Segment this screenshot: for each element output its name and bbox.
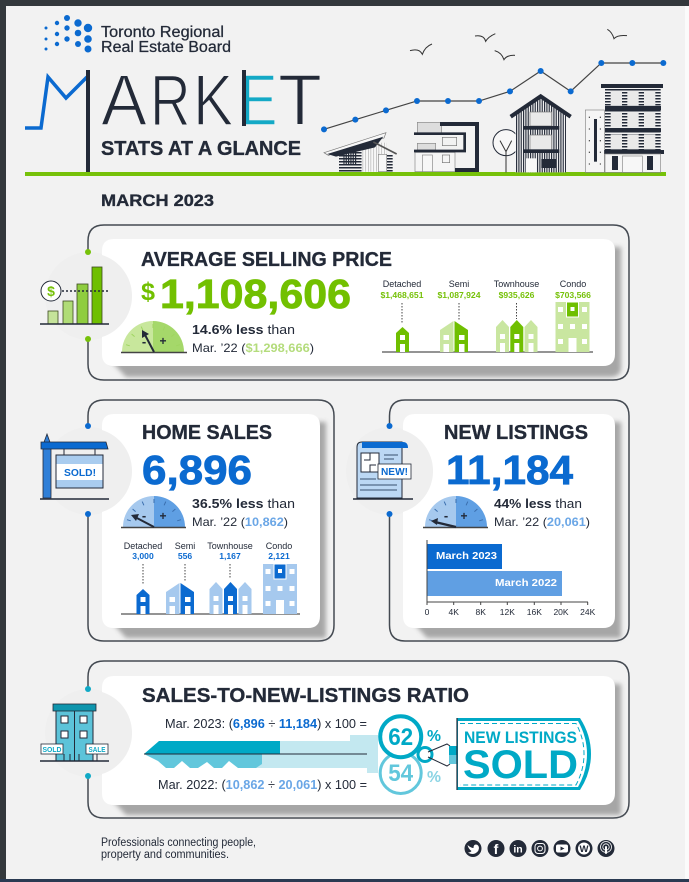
gauge: listings change: + bbox=[460, 509, 468, 523]
breakdown by home type: 3,000 bbox=[132, 551, 154, 561]
tag: new listings sold: SOLD bbox=[463, 743, 578, 787]
tag: new listings sold bbox=[428, 718, 591, 790]
title: MARKET: E bbox=[240, 60, 277, 141]
gauge: sales change bbox=[121, 496, 186, 528]
bar chart: listings March 2023 vs March 2022: 16K bbox=[527, 607, 542, 617]
breakdown by home type: Townhouse bbox=[207, 541, 253, 551]
title: MARKET: A bbox=[101, 61, 147, 141]
gauge: listings change: - bbox=[444, 508, 448, 523]
gauge: listings change bbox=[423, 496, 488, 528]
gauge: sales change: + bbox=[159, 509, 167, 523]
title: MARKET: R bbox=[150, 60, 191, 141]
footer tagline: property and communities. bbox=[101, 849, 229, 861]
title: MARKET bbox=[25, 60, 322, 176]
gauge: price change: + bbox=[159, 334, 167, 348]
bar chart: listings March 2023 vs March 2022: 24K bbox=[580, 607, 596, 617]
icon: bar chart with dollar bbox=[40, 267, 109, 324]
heading: NEW LISTINGS bbox=[444, 421, 588, 444]
icon: linkedin: in bbox=[513, 844, 523, 856]
breakdown by home type: Townhouse bbox=[494, 279, 539, 289]
icon: facebook bbox=[488, 840, 504, 857]
breakdown by home type: Condo bbox=[560, 279, 586, 289]
date heading: MARCH 2023 bbox=[101, 191, 214, 210]
social media icons bbox=[464, 840, 614, 857]
icon: new listing document bbox=[353, 442, 413, 499]
comparison text bbox=[494, 496, 590, 529]
house 3 bbox=[511, 96, 571, 172]
price: 1,108,606 bbox=[160, 271, 351, 317]
icon: wordpress: W bbox=[580, 844, 589, 855]
icon: building with sold and sale signs bbox=[40, 704, 109, 761]
icon: bar chart with dollar: $ bbox=[47, 283, 55, 299]
icon: sold sign bbox=[40, 434, 109, 499]
breakdown by home type: Detached bbox=[124, 541, 162, 551]
panel: home sales bbox=[40, 400, 334, 641]
logo: Toronto Regional Real Estate Board bbox=[44, 15, 231, 56]
icon: wordpress bbox=[576, 840, 592, 857]
tag: new listings sold: NEW LISTINGS bbox=[464, 729, 577, 747]
icon: podcast bbox=[598, 840, 614, 857]
comparison text: Mar. ’22 ( $1,298,666 ) bbox=[192, 341, 314, 355]
logo: Toronto Regional Real Estate Board: Toronto Regional bbox=[101, 24, 224, 41]
comparison text: 44% less than bbox=[494, 496, 582, 511]
footer tagline: Professionals connecting people, bbox=[101, 837, 256, 849]
bar chart: listings March 2023 vs March 2022: March 2023 bbox=[436, 550, 497, 562]
gauge: sales change: - bbox=[142, 508, 146, 523]
birds bbox=[410, 29, 627, 60]
breakdown by home type: $1,087,924 bbox=[437, 290, 481, 300]
ratio rings: % bbox=[427, 769, 441, 786]
bar chart: listings March 2023 vs March 2022: 0 bbox=[425, 607, 430, 617]
breakdown by home type: 1,167 bbox=[219, 551, 241, 561]
breakdown by home type: 2,121 bbox=[268, 551, 290, 561]
bar chart: listings March 2023 vs March 2022: 4K bbox=[448, 607, 459, 617]
heading: HOME SALES bbox=[142, 421, 272, 444]
comparison text: 14.6% less than bbox=[192, 322, 295, 337]
icon: instagram bbox=[532, 840, 548, 857]
green ground line bbox=[25, 172, 666, 176]
ratio rings: 62 bbox=[388, 724, 413, 751]
icon: sold sign: SOLD! bbox=[64, 468, 96, 479]
formula: March 2023: Mar. 2023: (6,896 ÷ 11,184) x 100 = bbox=[165, 717, 367, 731]
breakdown by home type bbox=[380, 279, 593, 352]
gauge: price change bbox=[121, 321, 187, 352]
house 1 bbox=[324, 133, 397, 172]
breakdown by home type: $703,566 bbox=[555, 290, 591, 300]
title: MARKET: K bbox=[193, 61, 233, 141]
comparison text: 36.5% less than bbox=[192, 496, 295, 511]
icon: building with sold and sale signs: SALE bbox=[88, 747, 106, 754]
breakdown by home type: 556 bbox=[178, 551, 192, 561]
icon: new listing document: NEW! bbox=[381, 467, 408, 478]
bar chart: listings March 2023 vs March 2022 bbox=[425, 540, 596, 617]
comparison text: Mar. ’22 (20,061) bbox=[494, 515, 590, 529]
logo: Toronto Regional Real Estate Board: Real Estate Board bbox=[101, 39, 231, 56]
icon: linkedin bbox=[510, 840, 526, 857]
gauge: price change: - bbox=[142, 334, 146, 349]
heading: SALES-TO-NEW-LISTINGS RATIO bbox=[142, 684, 469, 707]
heading: AVERAGE SELLING PRICE bbox=[141, 248, 392, 271]
tree bbox=[493, 130, 519, 172]
line chart over skyline bbox=[321, 60, 666, 132]
listings figure: 11,184 bbox=[446, 447, 573, 493]
title: MARKET: T bbox=[278, 61, 322, 141]
breakdown by home type: Semi bbox=[175, 541, 195, 551]
panel: average selling price bbox=[40, 225, 629, 380]
panel: new listings bbox=[346, 400, 629, 641]
breakdown by home type: $935,626 bbox=[499, 290, 535, 300]
bar chart: listings March 2023 vs March 2022: March 2022 bbox=[495, 577, 557, 589]
breakdown by home type: Condo bbox=[266, 541, 292, 551]
icon: facebook: f bbox=[494, 841, 499, 857]
icon: youtube bbox=[554, 840, 570, 857]
footer tagline bbox=[101, 837, 256, 861]
breakdown by home type: Detached bbox=[383, 279, 421, 289]
panel: sales-to-new-listings ratio bbox=[40, 661, 629, 818]
icon: twitter bbox=[464, 840, 482, 857]
ratio rings: 54 bbox=[388, 760, 414, 787]
breakdown by home type bbox=[121, 541, 300, 614]
bar chart: listings March 2023 vs March 2022: 20K bbox=[553, 607, 569, 617]
comparison text bbox=[192, 496, 295, 529]
breakdown by home type: $1,468,651 bbox=[380, 290, 424, 300]
bar chart: listings March 2023 vs March 2022: 12K bbox=[500, 607, 515, 617]
apartment building bbox=[585, 84, 664, 172]
formula: March 2022: Mar. 2022: (10,862 ÷ 20,061) x 100 = bbox=[158, 778, 367, 792]
ratio rings bbox=[380, 716, 441, 794]
bar chart: listings March 2023 vs March 2022: 8K bbox=[475, 607, 486, 617]
house 2 bbox=[414, 122, 477, 172]
subtitle: STATS AT A GLANCE bbox=[101, 138, 301, 160]
skyline illustration bbox=[321, 29, 666, 172]
breakdown by home type: Semi bbox=[449, 279, 469, 289]
sales figure: 6,896 bbox=[142, 447, 252, 493]
key graphic bbox=[144, 735, 378, 773]
icon: building with sold and sale signs: SOLD bbox=[42, 747, 62, 754]
comparison text bbox=[192, 322, 314, 355]
price: $ bbox=[141, 278, 155, 306]
ratio rings: % bbox=[427, 728, 441, 745]
comparison text: Mar. ’22 (10,862) bbox=[192, 515, 288, 529]
